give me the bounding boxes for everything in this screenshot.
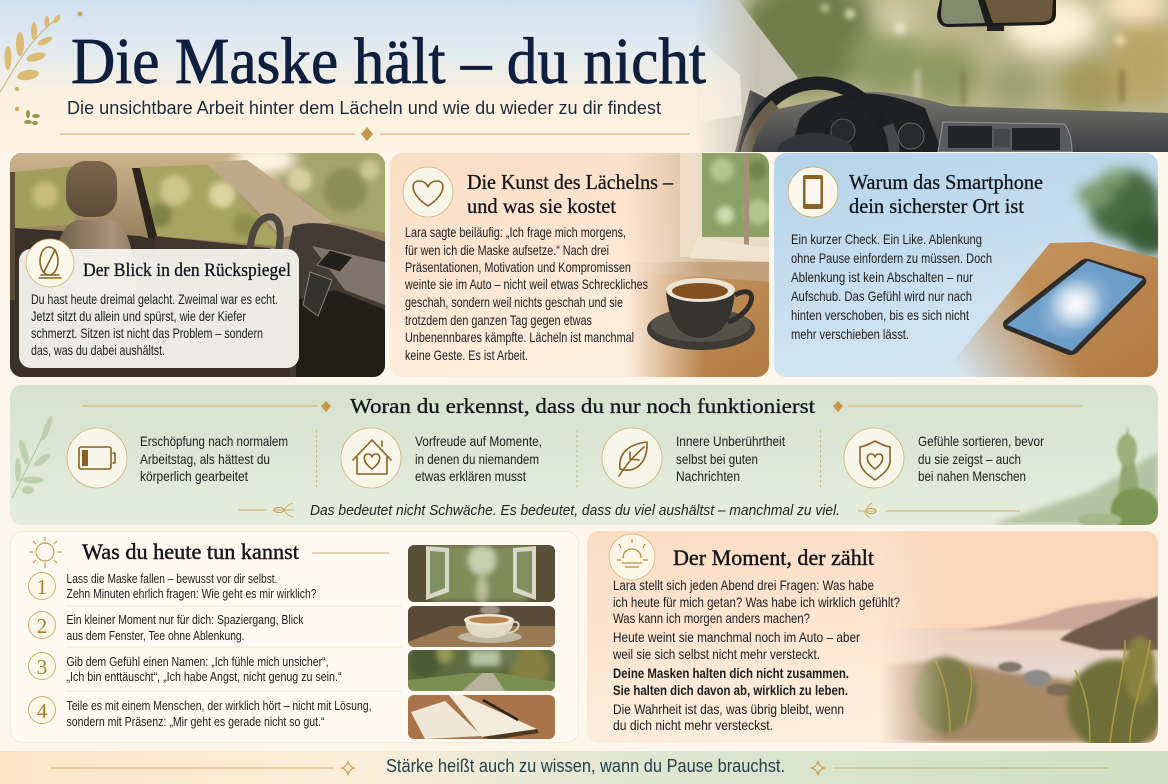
item: shield: du sie zeigst – auch	[918, 451, 1021, 467]
seat	[59, 161, 132, 249]
heading: Die Kunst des Lächelns –	[467, 170, 673, 194]
body text: keine Geste. Es ist Arbeit.	[405, 347, 528, 363]
icon: smartphone	[788, 167, 838, 217]
item: leaf: selbst bei guten	[676, 451, 758, 467]
green band background	[10, 385, 1159, 532]
heading	[849, 170, 1043, 218]
footer band	[0, 751, 1168, 784]
item: battery: Erschöpfung nach normalem	[140, 433, 288, 449]
heading: Was du heute tun kannst	[82, 539, 299, 564]
body text: ohne Pause einfordern zu müssen. Doch	[791, 250, 992, 266]
italic line ornaments	[238, 503, 1020, 518]
body text: Lara sagte beiläufig: „Ich frage mich morgens,	[405, 224, 626, 240]
body text: Ein kurzer Check. Ein Like. Ablenkung	[791, 231, 982, 247]
item: leaf: Innere Unberührtheit	[676, 433, 785, 449]
window and coffee photo	[390, 153, 771, 377]
steering wheel	[738, 76, 900, 152]
body text: trotzdem den ganzen Tag gegen etwas	[405, 312, 592, 328]
item: leaf: Nachrichten	[676, 468, 740, 484]
body text: weinte sie im Auto – nicht weil etwas Schreckliches	[404, 276, 648, 292]
heading ornaments	[82, 401, 1083, 412]
step 2: Ein kleiner Moment nur für dich: Spaziergang, Blick	[66, 612, 304, 627]
step 1: 1	[37, 575, 47, 599]
A-pillar	[700, 0, 798, 152]
step 1: Zehn Minuten ehrlich fragen: Wie geht es mir wirklich?	[66, 586, 316, 601]
item: house with heart	[341, 428, 542, 488]
body text: für wen ich die Maske aufsetze.“ Nach drei	[405, 242, 609, 258]
body text: Präsentationen, Motivation und Kompromissen	[405, 259, 631, 275]
heading: und was sie kostet	[467, 194, 616, 218]
step 4: sondern mit Präsenz: „Mir geht es gerade nicht so gut.“	[66, 714, 324, 729]
body text: Aufschub. Das Gefühl wird nur nach	[791, 288, 972, 304]
smartphone	[1003, 256, 1146, 355]
step 1: Lass die Maske fallen – bewusst vor dir selbst.	[66, 571, 278, 586]
item: house with heart: in denen du niemandem	[415, 451, 539, 467]
icon: sun	[29, 537, 62, 568]
header divider	[60, 127, 690, 141]
footer text: Stärke heißt auch zu wissen, wann du Pause brauchst.	[386, 756, 785, 776]
body text: schmerzt. Sitzen ist nicht das Problem – sondern	[31, 325, 263, 341]
step 4	[28, 696, 372, 729]
item: leaf	[602, 428, 785, 488]
seaside photo	[587, 531, 1163, 751]
icon: golden branch decoration	[0, 12, 82, 125]
step 2: aus dem Fenster, Tee ohne Ablenkung.	[66, 628, 244, 643]
item: house with heart: Vorfreude auf Momente,	[415, 433, 542, 449]
air vents	[938, 122, 1072, 152]
body text: Lara stellt sich jeden Abend drei Fragen: Was habe	[613, 577, 874, 593]
body text: Unbenennbares kämpfte. Lächeln ist manchmal	[405, 329, 634, 345]
photo: forest path	[408, 646, 555, 691]
panel: Die Kunst des Lächelns	[390, 153, 771, 377]
item: battery: Arbeitstag, als hättest du	[140, 451, 270, 467]
body text: ich heute für mich getan? Was habe ich wirklich gefühlt?	[613, 594, 900, 610]
step 1	[28, 571, 316, 601]
step 3	[28, 652, 342, 684]
heading: dein sicherster Ort ist	[849, 194, 1024, 218]
body text	[791, 231, 992, 342]
item: house with heart: etwas erklären musst	[415, 468, 526, 484]
section heading: Woran du erkennst, dass du nur noch funktionierst	[350, 394, 815, 418]
subtitle: Die unsichtbare Arbeit hinter dem Lächeln und wie du wieder zu dir findest	[67, 98, 661, 118]
info card	[19, 239, 299, 368]
panel: Warum das Smartphone	[774, 153, 1168, 377]
body text: Jetzt sitzt du allein und spürst, wie der Kiefer	[31, 308, 246, 324]
panel: Was du heute tun kannst	[10, 532, 578, 742]
header band with car photo	[0, 0, 1168, 152]
panel: Der Blick in den Rückspiegel	[10, 146, 385, 377]
title: Die Maske hält – du nicht	[71, 25, 706, 98]
step 4: 4	[37, 699, 48, 723]
coffee cup	[647, 278, 755, 350]
dashboard	[752, 92, 1168, 152]
body text: das, was du dabei aushältst.	[31, 342, 165, 358]
rear-view mirror	[937, 0, 1056, 31]
steering wheel	[250, 217, 280, 252]
step 4: Teile es mit einem Menschen, der wirklich hört – nicht mit Lösung,	[66, 698, 372, 713]
item: battery	[67, 428, 288, 488]
item: shield: bei nahen Menschen	[918, 468, 1026, 484]
panel: Woran du erkennst	[10, 385, 1159, 532]
body text: hinten verschoben, bis es sich nicht	[791, 307, 969, 323]
item: battery: körperlich gearbeitet	[140, 468, 248, 484]
heading: Warum das Smartphone	[849, 170, 1043, 194]
step 3: 3	[37, 655, 47, 679]
body text: weil sie sich selbst nicht mehr versteckt.	[612, 646, 820, 662]
photo: notebook and pen	[408, 695, 555, 740]
body text: Du hast heute dreimal gelacht. Zweimal war es echt.	[31, 291, 278, 307]
photo: tea cup	[408, 605, 555, 647]
body text: geschah, sondern weil nichts geschah und sie	[405, 294, 623, 310]
step 2	[28, 612, 304, 643]
body text: mehr verschieben lässt.	[791, 326, 909, 342]
icon: star left	[341, 761, 355, 775]
heading: Der Blick in den Rückspiegel	[83, 260, 291, 281]
body text	[404, 224, 648, 363]
phone on table photo	[774, 153, 1168, 377]
icon: sunrise	[609, 534, 655, 580]
dashboard	[280, 223, 385, 377]
body text: du dich nicht mehr versteckst.	[613, 717, 773, 733]
italic closing line: Das bedeutet nicht Schwäche. Es bedeutet, dass du viel aushältst – manchmal zu viel.	[310, 503, 840, 519]
icon: mirror	[26, 239, 74, 287]
heading: Der Moment, der zählt	[673, 545, 874, 570]
icon: heart	[403, 167, 453, 217]
panel: Der Moment, der zählt	[587, 531, 1163, 751]
body text	[612, 577, 900, 733]
photo: open window	[408, 545, 555, 604]
item: shield	[844, 428, 1044, 488]
icon: leaf sprig	[12, 415, 54, 498]
body text: Sie halten dich davon ab, wirklich zu leben.	[613, 682, 848, 698]
body text	[31, 291, 278, 358]
body text: Ablenkung ist kein Abschalten – nur	[791, 269, 973, 285]
body text: Heute weint sie manchmal noch im Auto – aber	[613, 629, 860, 645]
item: shield: Gefühle sortieren, bevor	[918, 433, 1044, 449]
icon: star right	[811, 761, 825, 775]
car interior photo	[10, 146, 385, 377]
step 3: Gib dem Gefühl einen Namen: „Ich fühle mich unsicher“,	[66, 654, 328, 669]
body text: Die Wahrheit ist das, was übrig bleibt, wenn	[613, 701, 844, 717]
body text: Was kann ich morgen anders machen?	[613, 610, 810, 626]
heading	[467, 170, 673, 218]
step 3: „Ich bin enttäuscht“, „Ich habe Angst, nicht genug zu sein.“	[66, 669, 342, 684]
body text: Deine Masken halten dich nicht zusammen.	[613, 665, 849, 681]
step 2: 2	[37, 614, 47, 638]
